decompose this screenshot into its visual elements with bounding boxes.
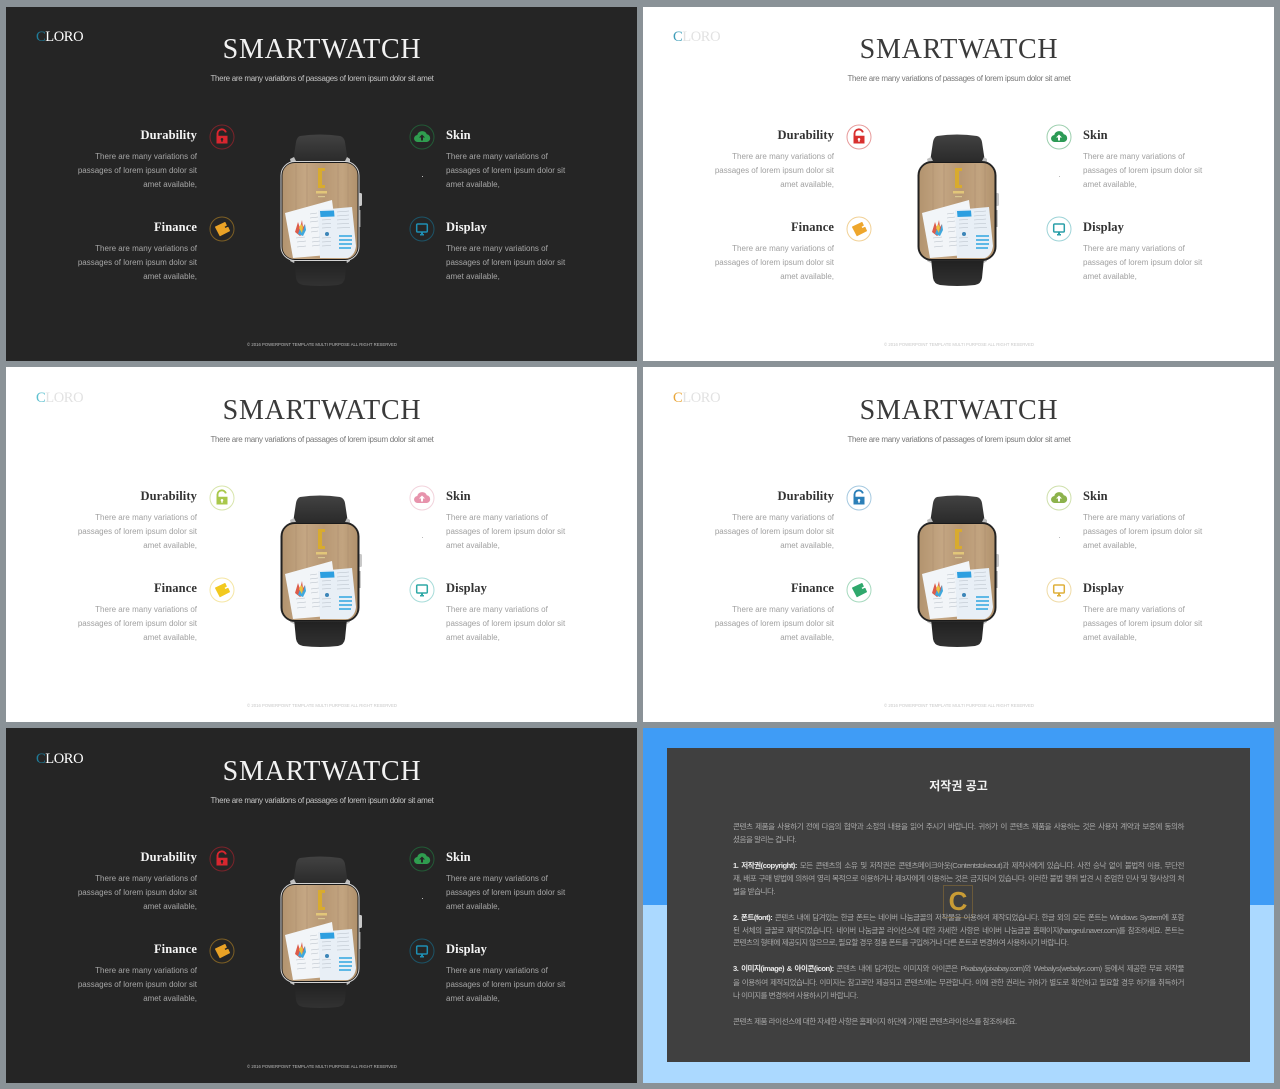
text: Finance: passages of lorem ipsum dolor sit [715, 619, 834, 628]
subtitle: There are many variations of passages of lorem ipsum dolor sit amet [847, 74, 1071, 83]
text: Skin: passages of lorem ipsum dolor sit [446, 888, 565, 897]
text: Finance [715, 244, 834, 281]
license line: 콘텐츠 제품 라이선스에 대한 자세한 사항은 홈페이지 하단에 기재된 콘텐츠라이선스를 참조하세요. [733, 1017, 1017, 1026]
footer: © 2016 POWERPOINT TEMPLATE MULTI PURPOSE ALL RIGHT RESERVED [884, 342, 1034, 347]
heading: Display: Display [1083, 581, 1124, 595]
icon: monitor [1046, 216, 1072, 242]
heading: Skin: Skin [446, 489, 471, 503]
text: Finance [78, 605, 197, 642]
font line 3: 콘텐츠의 형태에 제공되지 않으므로, 필요할 경우 정품 폰트를 구입하거나 다른 폰트로 변경하여 사용하시기 바랍니다. [733, 938, 1068, 947]
text: Skin: amet available, [446, 180, 500, 189]
icon: monitor [1046, 578, 1072, 602]
heading: Finance: Finance [154, 942, 197, 956]
icon: lock [846, 124, 872, 150]
text: Durability: amet available, [143, 180, 197, 189]
panel: copyright notice slide [643, 728, 1274, 1083]
footer: © 2016 POWERPOINT TEMPLATE MULTI PURPOSE ALL RIGHT RESERVED [247, 342, 397, 347]
text: Display: There are many variations of [1083, 605, 1185, 614]
text: Durability [715, 152, 834, 189]
panel: dark slide 1 [6, 7, 637, 361]
text: Durability: There are many variations of [95, 513, 197, 522]
icon: monitor [410, 578, 434, 602]
text: Durability: There are many variations of [732, 152, 834, 161]
icon: cloud [410, 486, 434, 510]
text: Finance: passages of lorem ipsum dolor sit [715, 258, 834, 267]
text: Finance: passages of lorem ipsum dolor sit [78, 980, 197, 989]
smartwatch [280, 134, 362, 286]
icon: lock [846, 486, 872, 510]
text: Skin [446, 152, 566, 189]
text: Durability [47, 872, 197, 914]
text: Durability: passages of lorem ipsum dolor sit [715, 527, 834, 536]
icon: cloud [1046, 124, 1072, 150]
text: Finance: amet available, [143, 272, 197, 281]
text: Skin: There are many variations of [1083, 513, 1185, 522]
heading: Durability: Durability [777, 489, 834, 503]
text: Durability [715, 513, 834, 550]
text: Display: There are many variations of [446, 605, 548, 614]
text: Skin: passages of lorem ipsum dolor sit [446, 527, 565, 536]
text: Skin: amet available, [1083, 180, 1137, 189]
text: Skin: There are many variations of [1083, 152, 1185, 161]
icon: cloud [1046, 486, 1072, 510]
text: Finance: amet available, [143, 633, 197, 642]
text: Display: There are many variations of [446, 966, 548, 975]
text: Skin [1083, 152, 1202, 189]
copyright line 2: 재, 배포 구매 방법에 의하여 영리 목적으로 이용하거나 제3자에게 이용하는 것은 금지되어 있습니다. 이러한 불법 행위 발견 시 준엄한 민사 및 형사상의 처 [733, 874, 1184, 883]
text: Display: passages of lorem ipsum dolor sit [446, 619, 565, 628]
icon: puzzle [210, 578, 234, 602]
subtitle: There are many variations of passages of lorem ipsum dolor sit amet [210, 74, 434, 83]
logo: CLORO [36, 751, 83, 767]
title: SMARTWATCH [860, 34, 1058, 65]
font line 1: 2. 폰트(font): 콘텐츠 내에 담겨있는 한글 폰트는 네이버 나눔글꼴의 저작물을 이용하여 제작되었습니다. 한글 외의 모든 폰트는 Windows System에 포함 [733, 913, 1184, 922]
title: SMARTWATCH [223, 34, 421, 65]
logo: CLORO [36, 29, 83, 45]
icon: puzzle [210, 216, 234, 242]
heading: Skin: Skin [1083, 128, 1108, 142]
heading: Finance: Finance [791, 220, 834, 234]
text: Display [1083, 244, 1202, 281]
text: Display: passages of lorem ipsum dolor sit [446, 980, 565, 989]
text: Display [446, 964, 616, 1006]
text: Display: amet available, [1083, 272, 1137, 281]
text: Skin: amet available, [446, 902, 500, 911]
text: Display: passages of lorem ipsum dolor sit [446, 258, 565, 267]
text: Display: amet available, [446, 994, 500, 1003]
logo: CLORO [673, 29, 720, 45]
text: Durability [78, 513, 197, 550]
icon: lock [210, 486, 234, 510]
icon: monitor [410, 216, 434, 242]
text: Finance [715, 605, 834, 642]
text: Durability: amet available, [780, 541, 834, 550]
subtitle: There are many variations of passages of lorem ipsum dolor sit amet [210, 435, 434, 444]
heading: Durability: Durability [140, 489, 197, 503]
text: Display [446, 244, 566, 281]
icon: puzzle [209, 938, 235, 964]
heading: Display: Display [446, 581, 487, 595]
text: Finance: passages of lorem ipsum dolor sit [78, 258, 197, 267]
text: Durability: passages of lorem ipsum dolor sit [78, 527, 197, 536]
icon: puzzle [846, 216, 872, 242]
text: Skin: There are many variations of [446, 513, 548, 522]
text: Finance: amet available, [143, 994, 197, 1003]
logo: CLORO [673, 390, 720, 406]
text: Durability: passages of lorem ipsum dolor sit [78, 888, 197, 897]
heading: Finance: Finance [791, 581, 834, 595]
text: Skin: There are many variations of [446, 152, 548, 161]
text: Finance: passages of lorem ipsum dolor sit [78, 619, 197, 628]
text: Durability: There are many variations of [95, 152, 197, 161]
text: Finance [78, 244, 197, 281]
text: Skin: passages of lorem ipsum dolor sit [1083, 166, 1202, 175]
panel: white slide 2 [643, 7, 1274, 361]
text: Skin [446, 872, 616, 914]
text: Display: amet available, [1083, 633, 1137, 642]
notice card [667, 748, 1250, 1062]
text: Finance: There are many variations of [732, 605, 834, 614]
text: Durability: amet available, [143, 902, 197, 911]
text: Display: There are many variations of [1083, 244, 1185, 253]
text: Durability: passages of lorem ipsum dolor sit [715, 166, 834, 175]
text: Durability: amet available, [780, 180, 834, 189]
watermark logo [943, 885, 973, 918]
text: Display [1083, 605, 1202, 642]
text: Durability: There are many variations of [732, 513, 834, 522]
text: Finance: amet available, [780, 272, 834, 281]
text: Skin [1083, 513, 1202, 550]
heading: Durability: Durability [140, 128, 197, 142]
logo: CLORO [36, 390, 83, 406]
heading: Skin: Skin [446, 128, 471, 142]
panel: white slide 4 [643, 368, 1274, 722]
notice title: 저작권 공고 [929, 779, 988, 793]
text: Finance: amet available, [780, 633, 834, 642]
heading: Finance: Finance [154, 220, 197, 234]
icon: lock [210, 124, 234, 150]
intro line 2: 셨음을 알리는 겁니다. [733, 835, 796, 844]
heading: Skin: Skin [446, 850, 471, 864]
watermark logo: C [949, 886, 967, 916]
text: Skin: passages of lorem ipsum dolor sit [1083, 527, 1202, 536]
font line 2: 된 서체의 글꼴로 제작되었습니다. 네이버 나눔글꼴 라이선스에 대한 자세한 사항은 네이버 나눔글꼴 홈페이지(hangeul.naver.com)를 참조하세요. 폰트는 [733, 926, 1184, 935]
image line 1: 3. 이미지(image) & 아이콘(icon): 콘텐츠 내에 담겨있는 이미지와 아이콘은 Pixabay(pixabay.com)와 Webalys(webalys.com) 등에서 제공한 무료 저작물 [733, 964, 1184, 973]
heading: Durability: Durability [140, 850, 197, 864]
text: Finance: There are many variations of [95, 605, 197, 614]
footer: © 2016 POWERPOINT TEMPLATE MULTI PURPOSE ALL RIGHT RESERVED [247, 1064, 397, 1069]
title: SMARTWATCH [223, 756, 421, 787]
image line 3: 나 이미지를 변경하여 사용하시기 바랍니다. [733, 991, 858, 1000]
text: Display: amet available, [446, 272, 500, 281]
text: Finance [47, 964, 197, 1006]
text: Display: amet available, [446, 633, 500, 642]
panel: dark slide 5 [6, 729, 637, 1083]
image line 2: 을 이용하여 제작되었습니다. 이미지는 참고로만 제공되고 콘텐츠에는 무관합니다. 이에 관한 권리는 귀하가 별도로 확인하고 필요할 경우 허가를 취득하거 [733, 978, 1184, 987]
footer: © 2016 POWERPOINT TEMPLATE MULTI PURPOSE ALL RIGHT RESERVED [884, 703, 1034, 708]
smartwatch [918, 496, 999, 647]
smartwatch [918, 134, 999, 286]
copyright line 1: 1. 저작권(copyright): 모든 콘텐츠의 소유 및 저작권은 콘텐츠메이크아웃(Contentstokeout)과 제작사에게 있습니다. 사전 승낙 없이 불법적 이용, 무단전 [733, 861, 1184, 870]
text: Skin: passages of lorem ipsum dolor sit [446, 166, 565, 175]
text: Display: There are many variations of [446, 244, 548, 253]
subtitle: There are many variations of passages of lorem ipsum dolor sit amet [847, 435, 1071, 444]
text: Display [446, 605, 566, 642]
text: Skin: amet available, [1083, 541, 1137, 550]
icon: monitor [409, 938, 435, 964]
text: Durability: amet available, [143, 541, 197, 550]
text: Skin: There are many variations of [446, 874, 548, 883]
text: Display: passages of lorem ipsum dolor sit [1083, 619, 1202, 628]
heading: Display: Display [446, 220, 487, 234]
text: Skin: amet available, [446, 541, 500, 550]
text: Durability: There are many variations of [95, 874, 197, 883]
text: Durability [78, 152, 197, 189]
smartwatch [280, 496, 362, 647]
heading: Skin: Skin [1083, 489, 1108, 503]
heading: Display: Display [446, 942, 487, 956]
text: Display: passages of lorem ipsum dolor sit [1083, 258, 1202, 267]
intro line 1: 콘텐츠 제품을 사용하기 전에 다음의 협약과 소정의 내용을 읽어 주시기 바랍니다. 귀하가 이 콘텐츠 제품을 사용하는 것은 사용자 계약과 보증에 동의하 [733, 822, 1184, 831]
panel: white slide 3 [6, 368, 637, 722]
subtitle: There are many variations of passages of lorem ipsum dolor sit amet [210, 796, 434, 805]
icon: cloud [409, 846, 435, 872]
heading: Finance: Finance [154, 581, 197, 595]
title: SMARTWATCH [860, 395, 1058, 426]
heading: Display: Display [1083, 220, 1124, 234]
icon: cloud [410, 124, 434, 150]
text: Skin [446, 513, 566, 550]
heading: Durability: Durability [777, 128, 834, 142]
text: Durability: passages of lorem ipsum dolor sit [78, 166, 197, 175]
icon: puzzle [846, 578, 872, 602]
copyright line 3: 벌을 받습니다. [733, 887, 775, 896]
text: Finance: There are many variations of [95, 244, 197, 253]
text: Finance: There are many variations of [95, 966, 197, 975]
smartwatch [280, 856, 364, 1009]
footer: © 2016 POWERPOINT TEMPLATE MULTI PURPOSE ALL RIGHT RESERVED [247, 703, 397, 708]
title: SMARTWATCH [223, 395, 421, 426]
icon: lock [209, 846, 235, 872]
text: Finance: There are many variations of [732, 244, 834, 253]
